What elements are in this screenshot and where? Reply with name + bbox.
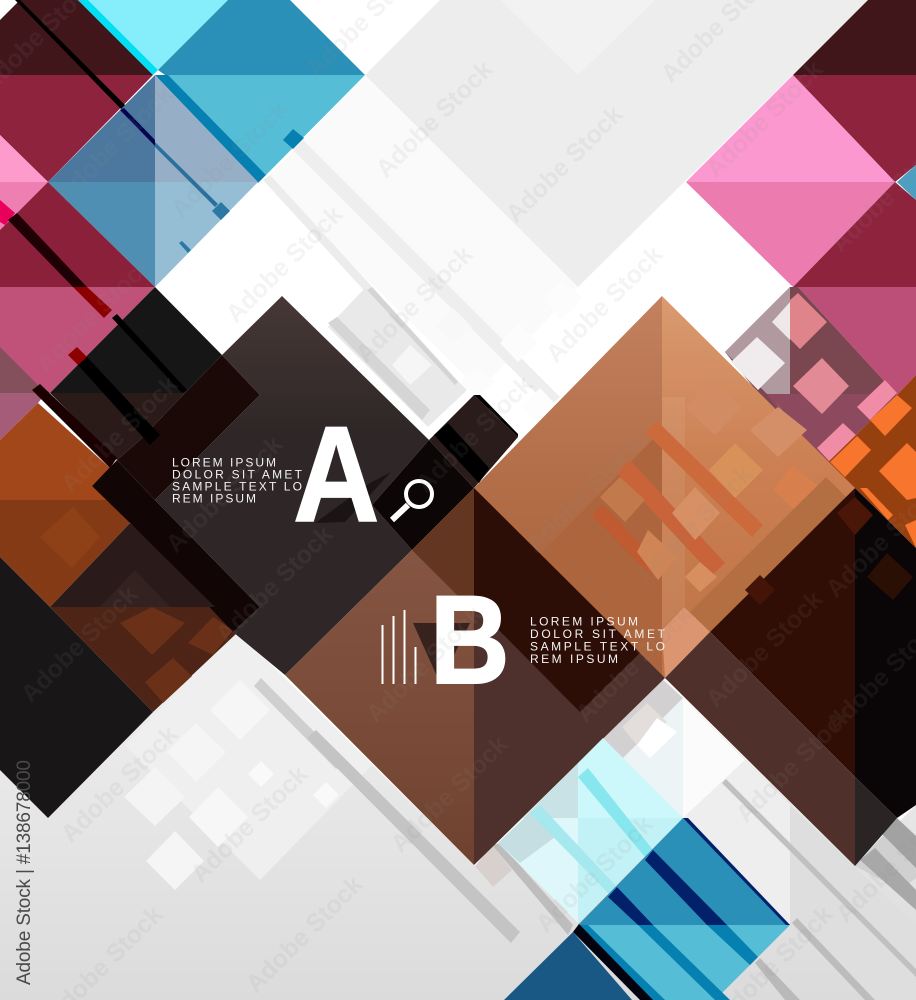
watermark: Adobe Stock: [30, 250, 158, 378]
panel: lower brown diamond B: [285, 488, 665, 865]
panel: top-right maroon and pink: [686, 0, 916, 395]
text block: A caption: [172, 456, 303, 506]
decorative shadow behind A: [315, 472, 391, 523]
watermark: Adobe Stock: [220, 200, 348, 328]
watermark: Adobe Stock: [370, 55, 498, 183]
watermark: Adobe Stock: [360, 600, 488, 728]
text block: B caption: REM IPSUM: [530, 652, 618, 666]
watermark: Adobe Stock: [160, 430, 288, 558]
panel: left orange diamond: [0, 403, 130, 607]
watermark id: Adobe Stock | #138678000: [14, 760, 35, 985]
panel: right orange pattern: [820, 375, 916, 548]
panel: big orange diamond: [474, 296, 855, 680]
panel: bottom-left black diamond: [0, 557, 153, 818]
panel: dark overlays on left: [50, 460, 260, 632]
text block: A caption: DOLOR SIT AMET: [172, 468, 303, 482]
watermark: Adobe Stock: [630, 460, 758, 588]
panel: lower blue diamond: [578, 818, 790, 1000]
panel: pale cyan diamond: [498, 738, 683, 923]
watermark: Adobe Stock: [700, 55, 828, 183]
text block: B caption: SAMPLE TEXT LO: [530, 640, 665, 654]
panel: top cyan and blue diamond: [78, 0, 365, 183]
heading: letter A: A: [293, 399, 379, 551]
panel: black diamond with stripes: [32, 287, 260, 500]
watermark: Adobe Stock: [730, 700, 858, 828]
decorative shadow behind B: [413, 623, 470, 683]
panel: left brown triangle: [50, 607, 238, 712]
text block: A caption: LOREM IPSUM: [172, 456, 276, 470]
icon: magnifier: [392, 481, 432, 520]
panel: right dark diamond: [665, 488, 916, 866]
panel: bottom grey field: [0, 632, 916, 1000]
watermark: Adobe Stock: [500, 100, 628, 228]
watermark: Adobe Stock: [520, 430, 648, 558]
watermark: Adobe Stock: [15, 580, 143, 708]
panel: black diamond with magnifier: [372, 395, 518, 550]
panel: left pink and maroon: [0, 135, 155, 440]
text block: A caption: SAMPLE TEXT LO: [172, 480, 302, 494]
text block: B caption: DOLOR SIT AMET: [530, 627, 666, 641]
icon: bars: [382, 610, 416, 684]
panel: translucent blue diamond: [48, 75, 258, 287]
watermark: Adobe Stock: [55, 370, 183, 498]
watermark: Adobe Stock: [530, 810, 658, 938]
watermark: Adobe Stock: [540, 240, 668, 368]
watermark: Adobe Stock: [185, 760, 313, 888]
watermark: Adobe Stock: [210, 520, 338, 648]
watermark: Adobe Stock: [55, 720, 183, 848]
watermark: Adobe Stock: [385, 730, 513, 858]
panel: top-left maroon diamond: [0, 0, 155, 182]
watermark: Adobe Stock: [570, 600, 698, 728]
watermark: Adobe Stock: [700, 585, 828, 713]
watermark: Adobe Stock: [410, 370, 538, 498]
text block: B caption: [530, 614, 666, 666]
heading: letter B: B: [430, 569, 509, 710]
panel: dark blue corner: [504, 924, 653, 1000]
watermark: Adobe Stock: [240, 870, 368, 998]
watermark: Adobe Stock: [50, 80, 178, 208]
panel: dark triangle centre: [474, 488, 640, 712]
panel: muted diamond pattern: [725, 287, 897, 470]
watermark: Adobe Stock: [350, 240, 478, 368]
text block: A caption: REM IPSUM: [172, 492, 256, 506]
watermark: Adobe Stock: [165, 95, 293, 223]
text block: B caption: LOREM IPSUM: [530, 614, 638, 628]
panel: main dark diamond A: [155, 296, 429, 675]
